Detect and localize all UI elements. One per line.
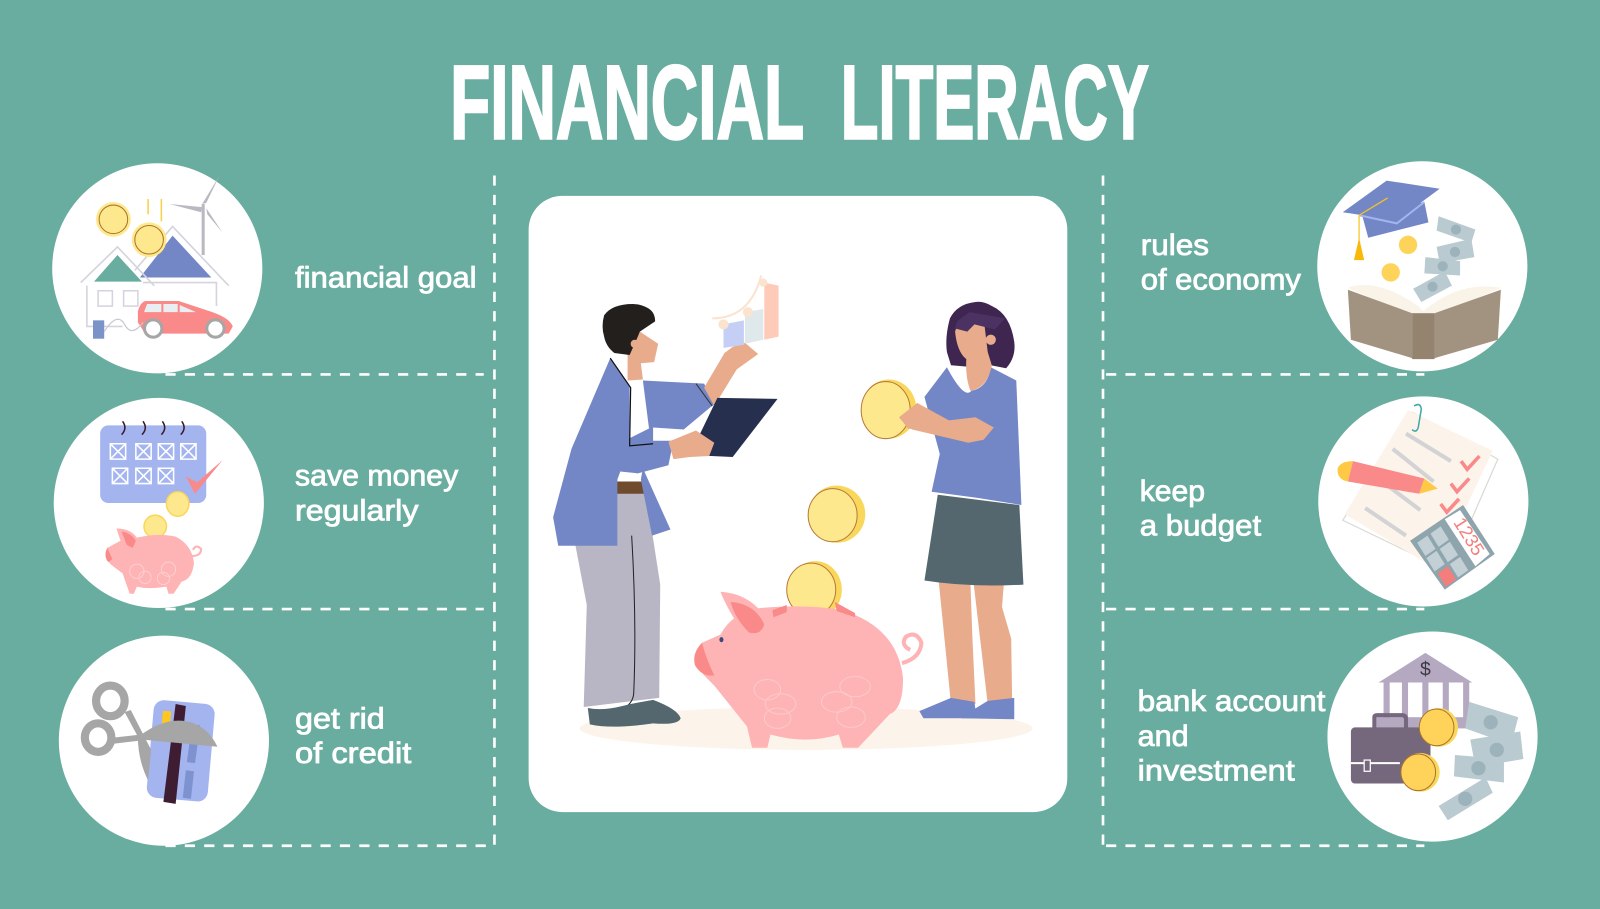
circle background — [1317, 161, 1527, 371]
label: financial goal: financial goal — [295, 262, 477, 295]
man's hand on tablet — [668, 431, 714, 459]
icon: calendar and piggy bank — [100, 421, 223, 594]
label: save money regularly: regularly — [295, 494, 419, 527]
panel: keep a budget — [1318, 396, 1528, 607]
label: save money regularly: save money — [295, 460, 458, 493]
falling coin — [808, 486, 865, 543]
hand over coin — [899, 403, 944, 433]
label: keep a budget — [1140, 475, 1261, 543]
panel: rules of economy — [1317, 161, 1527, 371]
panel: bank account and investment — [1327, 632, 1538, 842]
piggy bank — [694, 592, 921, 748]
label: bank account and investment: bank account — [1138, 685, 1325, 718]
circle background — [59, 636, 269, 846]
label: rules of economy: of economy — [1141, 264, 1301, 297]
label: get rid of credit — [295, 702, 411, 770]
label: bank account and investment: investment — [1138, 754, 1295, 787]
label: keep a budget: keep — [1140, 475, 1205, 508]
man figure — [553, 304, 758, 727]
tablet — [690, 398, 778, 457]
coin entering slot — [787, 561, 842, 618]
label: bank account and investment — [1138, 685, 1325, 787]
circle background — [1318, 396, 1528, 607]
panel: save money regularly — [54, 398, 264, 608]
label: get rid of credit: get rid — [295, 702, 385, 735]
panel: central illustration — [529, 196, 1067, 812]
ground shadow — [580, 707, 1033, 750]
panel: financial goal — [52, 163, 262, 373]
label: save money regularly — [295, 460, 458, 527]
circle background — [1327, 632, 1538, 842]
title: LITERACY — [841, 45, 1149, 162]
woman figure — [899, 302, 1023, 719]
label: get rid of credit: of credit — [295, 737, 411, 770]
circle background — [52, 163, 262, 373]
circle background — [54, 398, 264, 608]
floating bar chart — [712, 275, 779, 348]
coin in woman's hands — [861, 380, 916, 439]
label: rules of economy — [1141, 229, 1301, 297]
icon: bank, briefcase, coins, banknotes — [1351, 653, 1523, 820]
label: keep a budget: a budget — [1140, 510, 1261, 543]
label: bank account and investment: and — [1138, 720, 1189, 753]
icon: scissors and credit card — [85, 686, 217, 804]
icon: checklist, pencil, calculator — [1338, 405, 1498, 590]
title: FINANCIAL — [450, 45, 804, 162]
icon: checklist, pencil, calculator: 1235 — [1450, 513, 1489, 559]
icon: bank, briefcase, coins, banknotes: $ — [1420, 658, 1431, 680]
icon: graduation cap and book — [1343, 181, 1501, 359]
label: rules of economy: rules — [1141, 229, 1209, 262]
panel: get rid of credit — [59, 636, 269, 846]
icon: house, car, coins — [81, 175, 233, 339]
